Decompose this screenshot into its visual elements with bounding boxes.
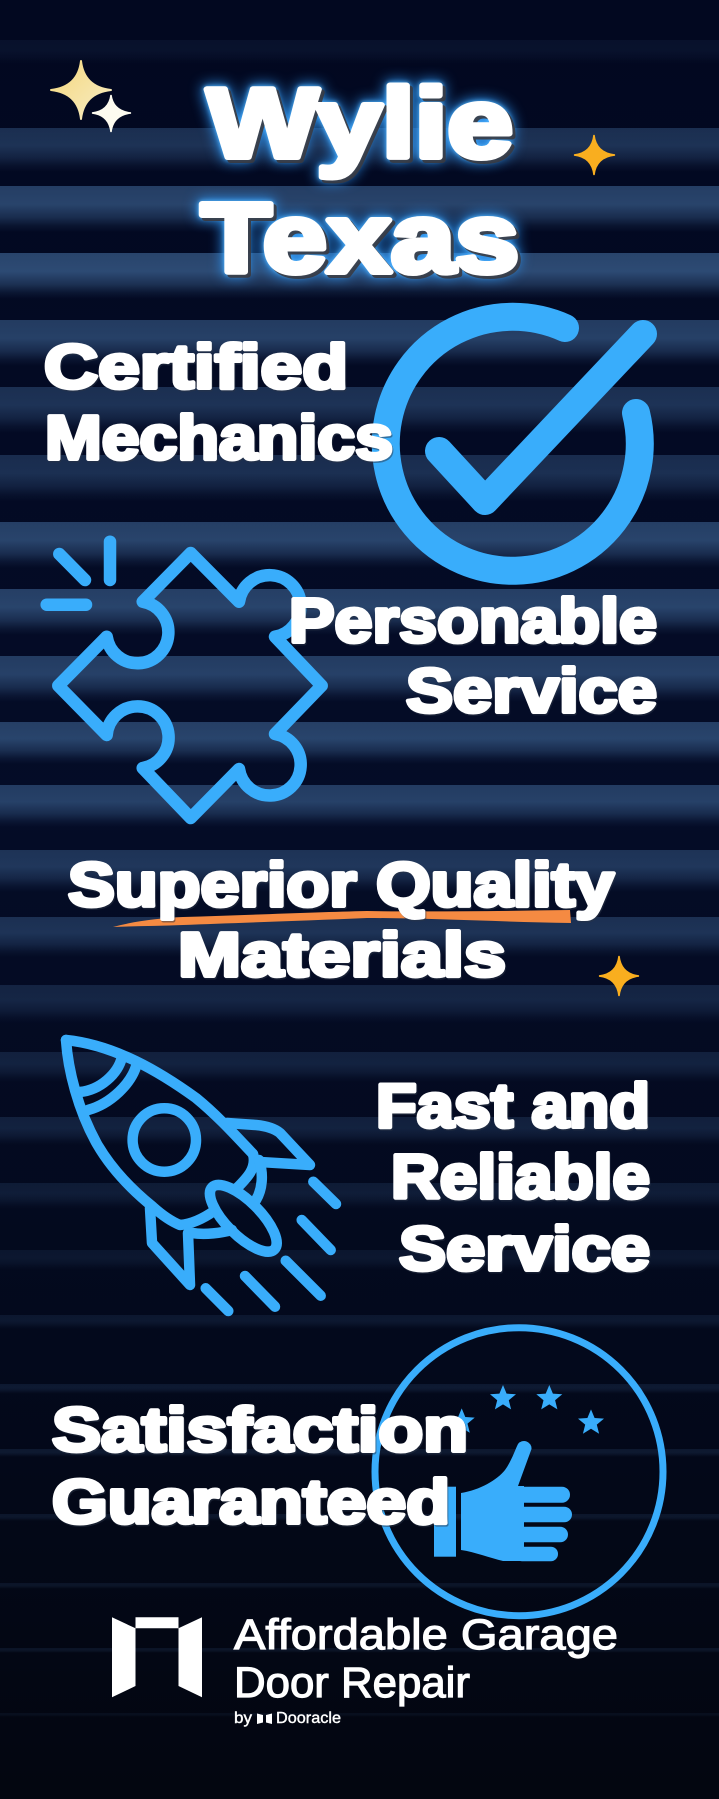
heading: certified mechanics: Certified <box>44 333 348 402</box>
logo: company name: Affordable Garage <box>234 1611 618 1659</box>
icon: rocket <box>66 1040 336 1311</box>
title: Texas <box>201 183 519 293</box>
icon: check mark in circle <box>386 317 643 571</box>
icon: gold sparkle <box>51 61 111 119</box>
heading: personable service: Service <box>406 657 657 726</box>
title: Wylie <box>207 68 513 178</box>
heading: superior quality materials: Superior Quality <box>68 851 615 920</box>
heading: superior quality materials: Materials <box>178 921 506 990</box>
icon: orange sparkle middle <box>599 956 639 996</box>
heading: satisfaction guaranteed <box>52 1396 468 1537</box>
logo: company name <box>234 1611 618 1707</box>
heading: satisfaction guaranteed: Satisfaction <box>52 1396 468 1465</box>
heading: fast and reliable service <box>376 1072 650 1284</box>
logo: company name: Door Repair <box>234 1659 470 1707</box>
icon: orange sparkle top right <box>574 135 615 175</box>
heading: personable service <box>289 587 657 726</box>
icon: puzzle piece with spark lines <box>47 542 322 818</box>
logo: by Dooracle: Dooracle <box>276 1710 341 1727</box>
heading: superior quality materials <box>68 851 615 990</box>
logo: by Dooracle <box>234 1710 341 1727</box>
title <box>201 68 519 293</box>
logo: by Dooracle: by <box>234 1710 252 1727</box>
heading: fast and reliable service: Reliable <box>391 1143 650 1212</box>
logo: door mark <box>112 1617 202 1697</box>
heading: personable service: Personable <box>289 587 657 656</box>
underline: orange brush stroke <box>113 910 571 927</box>
heading: fast and reliable service: Fast and <box>376 1072 650 1141</box>
heading: fast and reliable service: Service <box>399 1215 650 1284</box>
heading: certified mechanics <box>44 333 393 473</box>
icon: thumbs up in circle with stars <box>375 1328 663 1616</box>
heading: satisfaction guaranteed: Guaranteed <box>52 1468 450 1537</box>
icon: white sparkle <box>92 95 131 132</box>
heading: certified mechanics: Mechanics <box>45 404 393 473</box>
